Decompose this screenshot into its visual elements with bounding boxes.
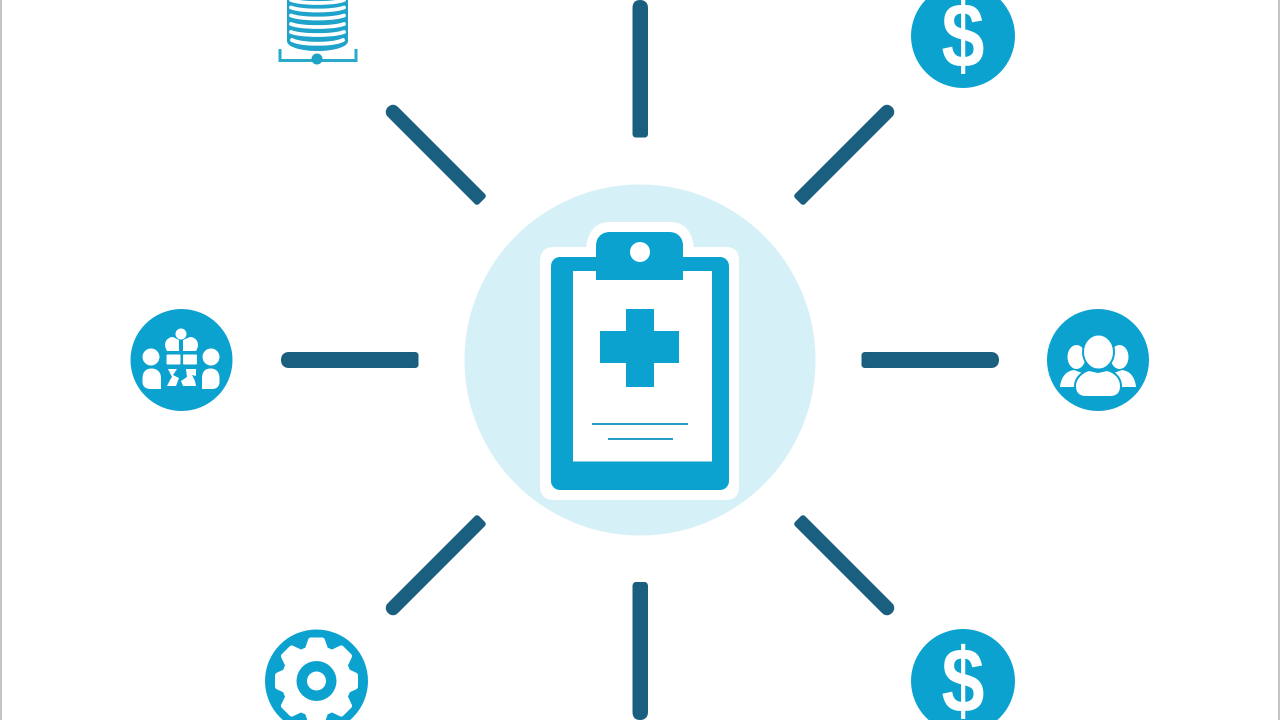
spoke: left xyxy=(281,352,418,368)
clipboard text lines xyxy=(592,423,688,440)
clipboard board xyxy=(551,257,729,490)
icon: database server xyxy=(280,0,356,64)
spoke: bottom-right xyxy=(794,515,894,615)
icon: gear xyxy=(265,630,368,720)
icon: dollar coin bottom right xyxy=(911,629,1015,720)
spokes xyxy=(281,0,999,720)
icon: group of people right xyxy=(1047,309,1149,411)
spoke: right xyxy=(862,352,999,368)
icon: people and organisation left xyxy=(130,309,232,411)
clipboard clip xyxy=(596,232,683,280)
medical cross xyxy=(600,309,679,387)
spoke: bottom xyxy=(632,582,648,720)
spoke: bottom-left xyxy=(386,515,486,615)
spoke: top-left xyxy=(386,105,486,205)
spoke: top xyxy=(632,0,648,138)
pale blue hub circle xyxy=(464,184,816,536)
central hub: clipboard in pale circle xyxy=(464,184,816,536)
clipboard white halo xyxy=(540,222,739,500)
icon: dollar coin top right xyxy=(911,0,1015,88)
spoke: top-right xyxy=(794,105,894,205)
